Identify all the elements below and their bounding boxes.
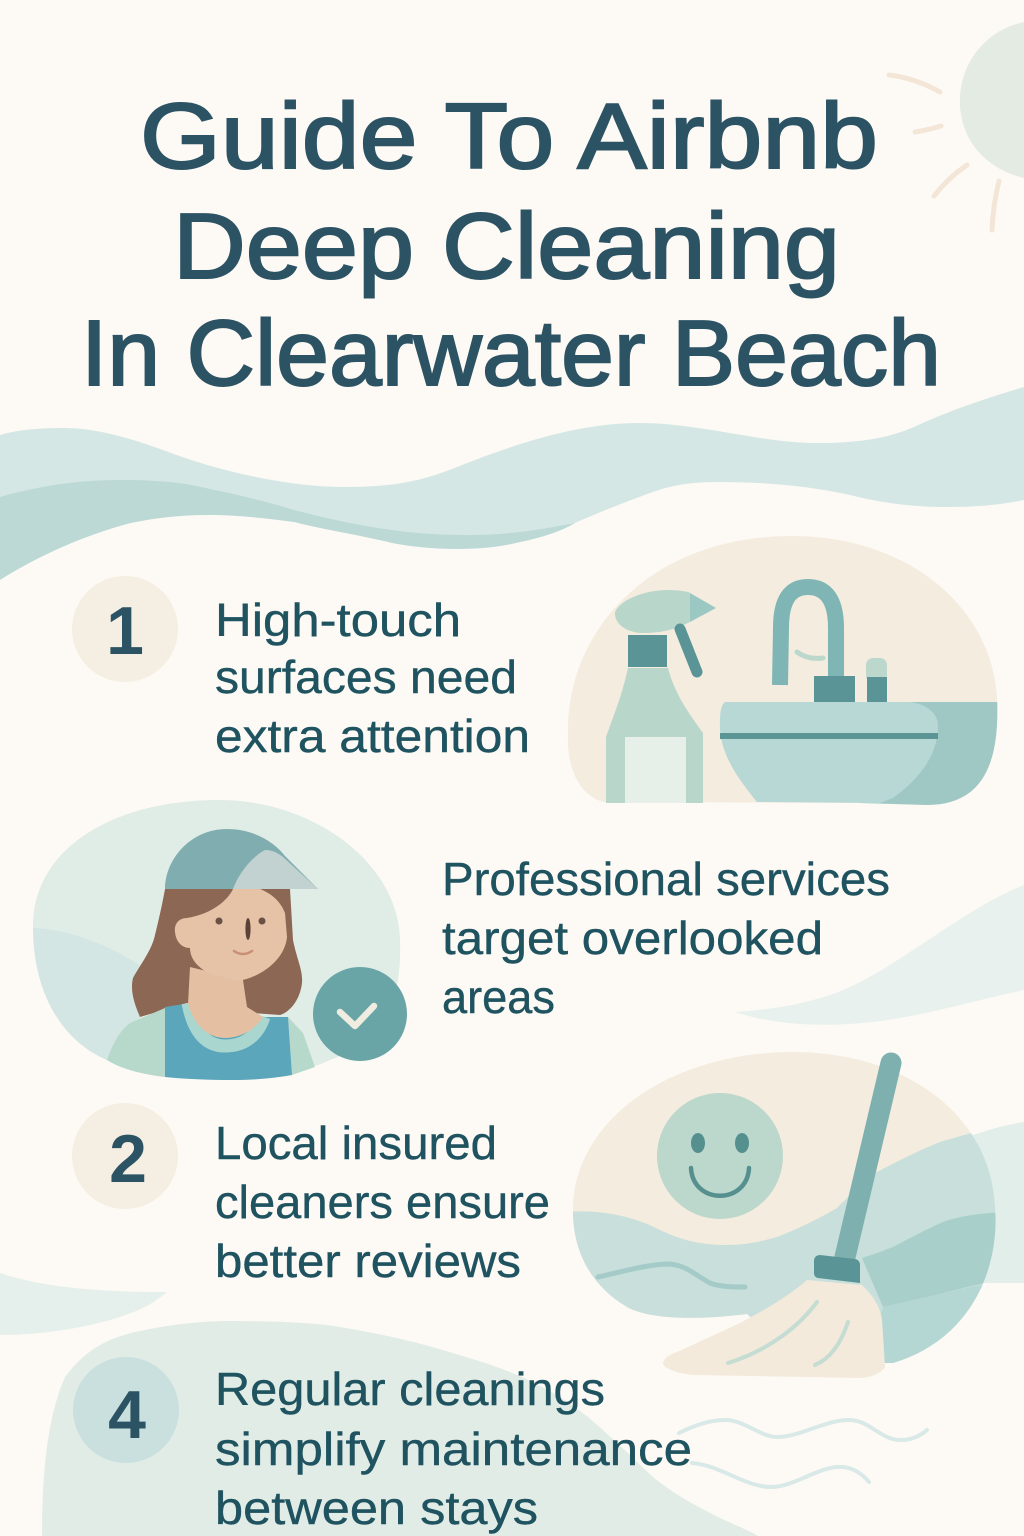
step 4 text: simplify maintenance bbox=[215, 1423, 692, 1475]
decorative wave right bbox=[735, 885, 1024, 1025]
step 3 text bbox=[442, 853, 890, 1023]
step 2 number badge bbox=[72, 1103, 178, 1209]
illustration: smiley and mop bbox=[565, 1052, 1024, 1400]
title bbox=[81, 84, 941, 405]
icon: sun bbox=[889, 22, 1024, 230]
step 2 text: cleaners ensure bbox=[215, 1176, 550, 1228]
title: Guide To Airbnb bbox=[140, 84, 878, 188]
step 2 text: Local insured bbox=[215, 1117, 497, 1169]
step 4 text bbox=[215, 1363, 692, 1534]
decorative wave left bbox=[0, 1273, 167, 1335]
decorative ripple lines bbox=[679, 1420, 927, 1487]
icon: mop bbox=[663, 1063, 891, 1378]
icon: smiley bbox=[657, 1093, 783, 1219]
step 1 text: surfaces need bbox=[215, 651, 517, 703]
decorative blob bottom bbox=[42, 1321, 758, 1536]
step 4 text: between stays bbox=[215, 1482, 538, 1534]
step 1 number badge: 1 bbox=[106, 593, 144, 669]
step 2 text bbox=[215, 1117, 550, 1287]
step 4 number badge bbox=[73, 1357, 179, 1463]
step 3 text: areas bbox=[442, 971, 555, 1023]
step 1 text bbox=[215, 594, 530, 762]
step 2 text: better reviews bbox=[215, 1235, 521, 1287]
icon: sink with faucet bbox=[720, 587, 1010, 812]
title: Deep Cleaning bbox=[173, 194, 840, 298]
illustration: cleaner portrait bbox=[30, 800, 407, 1080]
decorative waves bbox=[0, 387, 1024, 580]
step 3 text: target overlooked bbox=[442, 912, 823, 964]
step 1 text: High-touch bbox=[215, 594, 461, 646]
icon: check badge bbox=[313, 967, 407, 1061]
illustration: spray bottle and sink bbox=[568, 536, 1010, 812]
cleaner figure bbox=[107, 829, 318, 1080]
step 1 text: extra attention bbox=[215, 710, 530, 762]
title: In Clearwater Beach bbox=[81, 301, 941, 405]
step 4 text: Regular cleanings bbox=[215, 1363, 605, 1415]
step 3 text: Professional services bbox=[442, 853, 890, 905]
step 1 number badge bbox=[72, 576, 178, 682]
step 2 number badge: 2 bbox=[109, 1121, 147, 1197]
icon: spray bottle bbox=[606, 590, 716, 803]
step 4 number badge: 4 bbox=[108, 1377, 146, 1453]
